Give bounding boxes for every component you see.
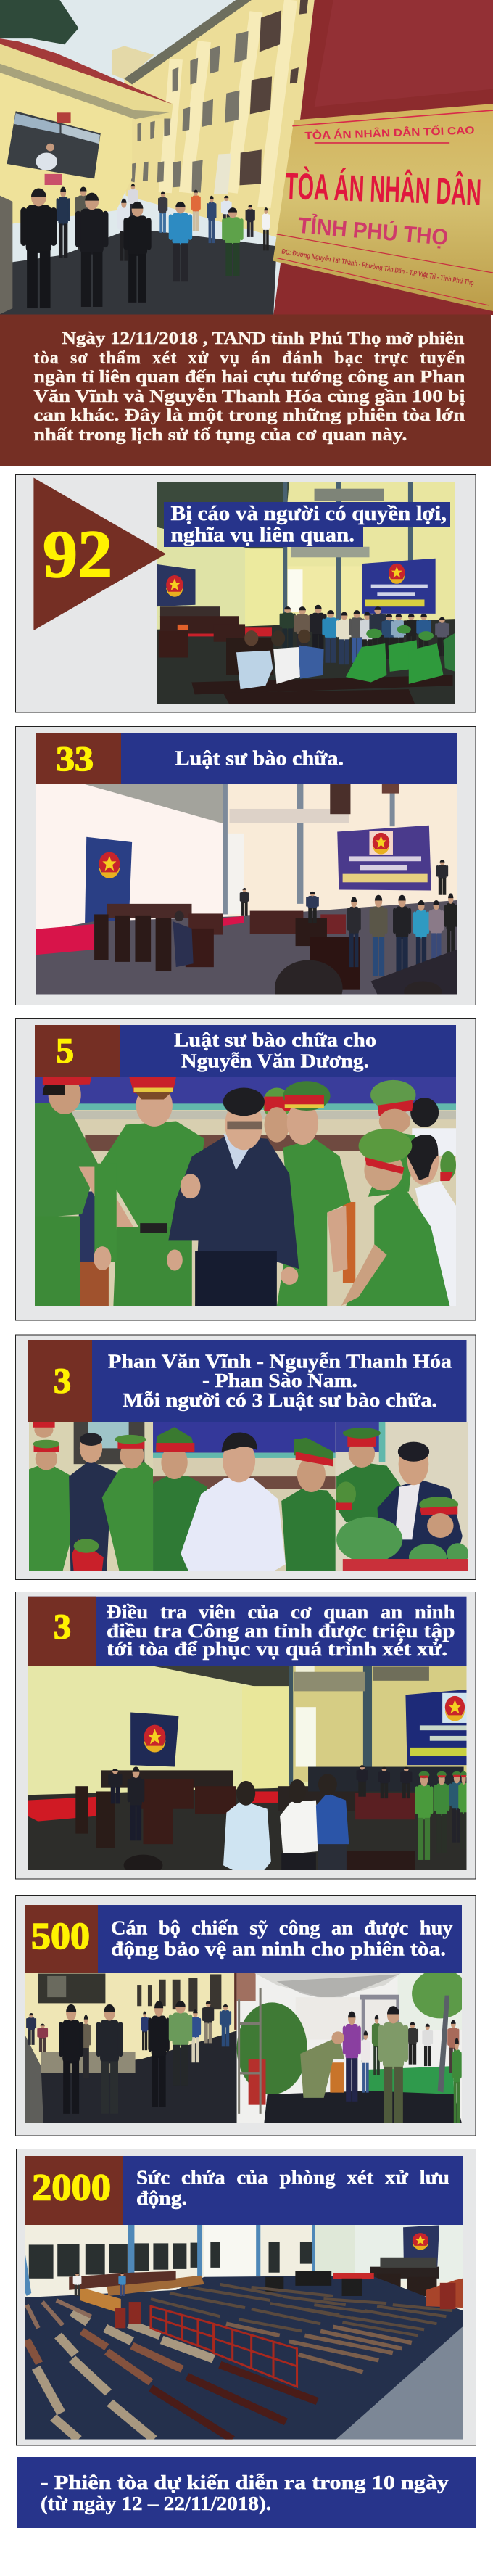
panel: 500 officers <box>16 1895 476 2136</box>
header: 3 investigators: Điều tra viên của cơ quan an ninh <box>107 1601 455 1623</box>
header: 3 investigators: điều tra Công an tỉnh được triệu tập <box>107 1620 455 1642</box>
intro paragraph: nhất trong lịch sử tố tụng của cơ quan này. <box>33 426 407 445</box>
caption: defendants: nghĩa vụ liên quan. <box>171 524 355 547</box>
closing note text: - Phiên tòa dự kiến diễn ra trong 10 ngày <box>41 2472 450 2493</box>
caption: defendants: Bị cáo và người có quyền lợi, <box>171 503 447 525</box>
hero photo: courthouse and sign: TỈNH PHÚ THỌ <box>297 213 450 250</box>
header: 2000: 2000 <box>32 2168 111 2209</box>
header: 3 lawyers each: 3 <box>54 1361 71 1401</box>
hero photo: courthouse and sign: TÒA ÁN NHÂN DÂN TỐI CAO <box>304 124 475 142</box>
header: 3 investigators: 3 <box>54 1606 71 1646</box>
intro text band <box>0 315 491 466</box>
intro paragraph: tòa sơ thẩm xét xử vụ án đánh bạc trực tuyến <box>33 349 465 368</box>
hero photo: courthouse and sign <box>0 0 493 315</box>
header: 5: 5 <box>56 1030 74 1071</box>
header: 500: 500 <box>31 1916 90 1957</box>
photo: three defendants escorted <box>29 1422 468 1571</box>
caption: defendants <box>164 502 450 547</box>
header: 33: Luật sư bào chữa. <box>175 747 344 770</box>
header: 500 <box>25 1905 462 1973</box>
intro paragraph: Ngày 12/11/2018 , TAND tỉnh Phú Thọ mở phiên <box>62 329 464 348</box>
panel: 3 lawyers each <box>16 1335 476 1580</box>
panel: 92 defendants <box>16 474 476 712</box>
photo: courtroom with three men standing <box>28 1666 467 1870</box>
big number triangle <box>33 477 166 630</box>
header: 2000: Sức chứa của phòng xét xử lưu <box>136 2166 450 2188</box>
number 92: 92 <box>43 517 112 592</box>
header: 3 investigators: tới tòa để phục vụ quá trình xét xử. <box>107 1638 447 1660</box>
photo: Nguyễn Văn Dương escorted <box>35 1077 456 1306</box>
photo: empty courtroom benches <box>25 2225 463 2440</box>
intro paragraph: Văn Vĩnh và Nguyễn Thanh Hóa cùng gần 100 bị <box>33 387 465 406</box>
header: 33: 33 <box>56 740 94 778</box>
photo: courtroom with defendants <box>157 482 455 704</box>
header: 5: Luật sư bào chữa cho <box>174 1029 376 1051</box>
header: 3 lawyers each: Phan Văn Vĩnh - Nguyễn Thanh Hóa <box>108 1351 452 1373</box>
header: 5: Nguyễn Văn Dương. <box>181 1050 369 1072</box>
intro paragraph <box>33 329 465 445</box>
intro paragraph: can khác. Đây là một trong những phiên tòa lớn <box>33 406 465 425</box>
header: 3 lawyers each <box>28 1340 467 1422</box>
header: 3 investigators <box>28 1597 467 1666</box>
panel: 3 investigators <box>16 1592 476 1879</box>
photo: security at courthouse <box>25 1973 462 2123</box>
header: 5 <box>35 1025 456 1077</box>
panel: 33 lawyers <box>16 727 476 1016</box>
closing note text <box>41 2472 450 2514</box>
closing note text: (từ ngày 12 – 22/11/2018). <box>41 2493 271 2514</box>
header: 500: Cán bộ chiến sỹ công an được huy <box>111 1917 453 1938</box>
panel: 5 lawyers <box>16 1019 476 1320</box>
header: 33 <box>36 733 457 784</box>
header: 3 lawyers each: Mỗi người có 3 Luật sư bào chữa. <box>123 1389 437 1411</box>
photo: courtroom wide view <box>36 784 457 994</box>
intro paragraph: ngàn tỉ liên quan đến hai cựu tướng công an Phan <box>33 368 465 387</box>
header: 500: động bảo vệ an ninh cho phiên tòa. <box>111 1938 446 1960</box>
header: 3 lawyers each: - Phan Sào Nam. <box>202 1370 357 1391</box>
panel: 2000 capacity <box>16 2149 476 2445</box>
closing note box <box>17 2457 476 2528</box>
header: 2000 <box>25 2156 463 2225</box>
header: 2000: động. <box>136 2187 187 2209</box>
